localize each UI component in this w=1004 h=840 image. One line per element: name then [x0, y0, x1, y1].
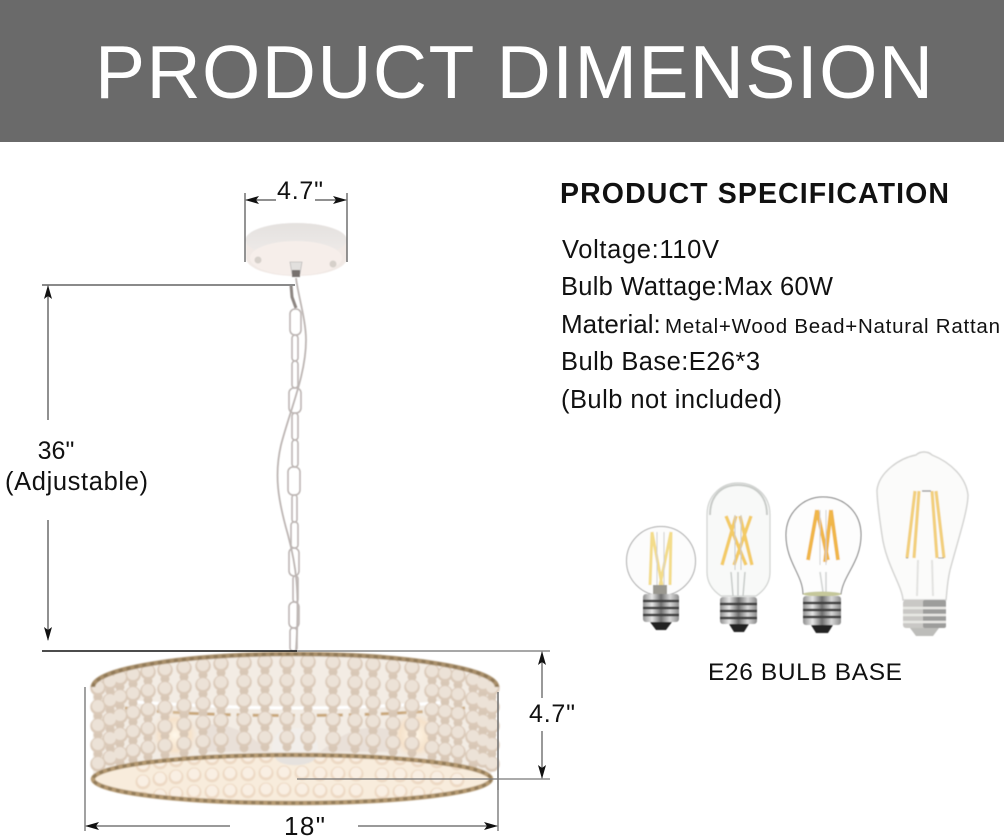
- shade interior: [93, 654, 497, 803]
- bulb caption: E26 BULB BASE: [708, 659, 902, 686]
- panel: product specification: [560, 178, 1000, 414]
- dimension: canopy width 4.7 in: [245, 177, 347, 262]
- title banner: [0, 0, 1004, 142]
- dimension: height 36 in adjustable: 36": [38, 437, 74, 465]
- dimension: canopy width 4.7 in: 4.7": [277, 177, 323, 205]
- bottom opening with far-side beads: [97, 756, 486, 800]
- icon: classic A-shape bulb: [786, 497, 861, 633]
- specification heading: PRODUCT SPECIFICATION: [560, 178, 949, 210]
- bulb wattage: Bulb Wattage:Max 60W: [561, 273, 833, 301]
- voltage: Voltage:110V: [562, 236, 719, 264]
- material: Metal+Wood Bead+Natural Rattan: [665, 315, 1000, 338]
- pendant lamp shade: [93, 654, 497, 803]
- bulb note: (Bulb not included): [561, 386, 782, 414]
- bottom rattan ring: [93, 755, 491, 803]
- dimension: shade width 18 in: [85, 687, 498, 840]
- dimension: height 36 in adjustable: (Adjustable): [5, 468, 148, 496]
- top rattan ring: [93, 654, 497, 687]
- ceiling canopy: [246, 223, 347, 277]
- icon: four filament bulbs: [626, 452, 968, 636]
- chain and wire: [277, 278, 306, 651]
- bulb base: Bulb Base:E26*3: [561, 348, 760, 376]
- icon: tubular bulb: [707, 483, 770, 632]
- material: Material:: [561, 309, 661, 339]
- wooden bead strands: [98, 661, 492, 772]
- icon: globe bulb: [626, 526, 696, 630]
- icon: ST64 vintage bulb: [877, 452, 968, 636]
- dimension: height 36 in adjustable: [5, 285, 297, 651]
- title banner: PRODUCT DIMENSION: [95, 30, 933, 114]
- lamp inner frame: [125, 702, 465, 761]
- dimension: shade height 4.7 in: 4.7": [529, 700, 575, 728]
